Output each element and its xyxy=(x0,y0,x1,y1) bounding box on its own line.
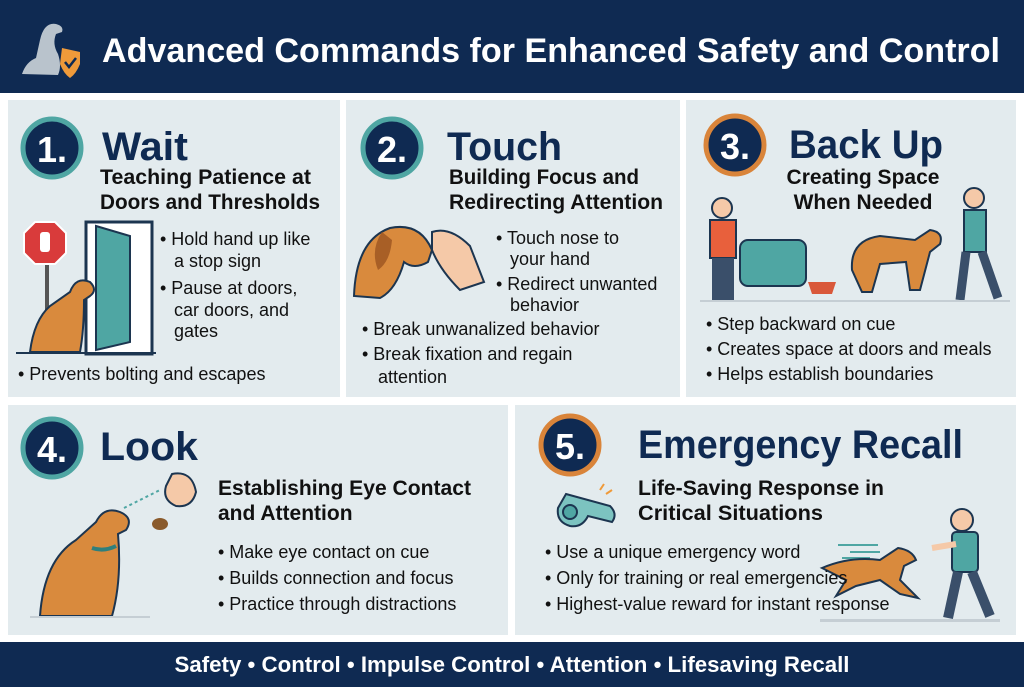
icon: dog with shield xyxy=(22,24,80,78)
subtitle: Life-Saving Response in xyxy=(638,477,884,500)
bullets: • Helps establish boundaries xyxy=(706,364,933,384)
bullets: • Prevents bolting and escapes xyxy=(18,364,265,384)
panel: 4 look xyxy=(8,405,508,635)
footer: Safety • Control • Impulse Control • Attention • Lifesaving Recall xyxy=(174,652,850,677)
bullets: • Break unwanalized behavior xyxy=(362,319,599,339)
bullets: • Use a unique emergency word xyxy=(545,542,800,562)
bullets xyxy=(18,229,310,384)
panel: 3 back up xyxy=(686,100,1016,397)
title: Advanced Commands for Enhanced Safety and Control xyxy=(102,32,1000,70)
subtitle: Teaching Patience at xyxy=(100,166,311,189)
badge 5 xyxy=(541,416,599,474)
bullets xyxy=(706,314,991,384)
icon: whistle xyxy=(558,484,615,526)
bullets: • Hold hand up like xyxy=(160,229,310,249)
bullets: • Highest-value reward for instant response xyxy=(545,594,889,614)
panel: 5 emergency recall xyxy=(515,405,1016,635)
badge 1 xyxy=(23,119,81,177)
badge 3 xyxy=(706,116,764,174)
bullets: • Redirect unwanted xyxy=(496,274,657,294)
subtitle: Creating Space xyxy=(787,166,939,189)
header band xyxy=(0,0,1024,93)
illustration: stop sign, door, dog xyxy=(16,222,156,354)
subtitle: Redirecting Attention xyxy=(449,191,663,214)
subtitle xyxy=(638,477,884,525)
bullets: • Make eye contact on cue xyxy=(218,542,429,562)
subtitle: When Needed xyxy=(794,191,932,214)
subtitle: Building Focus and xyxy=(449,166,639,189)
bullets: • Pause at doors, xyxy=(160,278,297,298)
badge 2: 2. xyxy=(377,129,407,170)
illustration: sitting dog looking at face xyxy=(30,473,196,618)
bullets xyxy=(362,228,657,387)
badge 1: 1. xyxy=(37,129,67,170)
subtitle: Doors and Thresholds xyxy=(100,191,320,214)
badge 2 xyxy=(363,119,421,177)
panel: 2 touch xyxy=(346,100,680,397)
subtitle xyxy=(218,477,471,525)
bullets: • Step backward on cue xyxy=(706,314,895,334)
heading: Touch: Touch xyxy=(447,125,562,169)
bullets: car doors, and xyxy=(174,300,289,320)
subtitle xyxy=(449,166,663,214)
illustration: person, couch, bowl, dog, person xyxy=(700,188,1010,302)
bullets: • Builds connection and focus xyxy=(218,568,453,588)
heading: Back Up: Back Up xyxy=(789,123,943,167)
illustration: running dog and person xyxy=(820,509,1000,622)
panel: 1 wait xyxy=(8,100,340,397)
subtitle xyxy=(100,166,320,214)
heading: Wait: Wait xyxy=(102,125,188,169)
bullets: • Creates space at doors and meals xyxy=(706,339,991,359)
bullets xyxy=(218,542,456,614)
subtitle: and Attention xyxy=(218,502,353,525)
bullets: a stop sign xyxy=(174,251,261,271)
heading: Look: Look xyxy=(100,425,199,469)
bullets: • Practice through distractions xyxy=(218,594,456,614)
bullets xyxy=(545,542,889,614)
bullets: your hand xyxy=(510,249,590,269)
bullets: • Break fixation and regain xyxy=(362,344,572,364)
bullets: • Only for training or real emergencies xyxy=(545,568,847,588)
footer xyxy=(0,642,1024,687)
badge 4 xyxy=(23,419,81,477)
bullets: attention xyxy=(378,367,447,387)
subtitle xyxy=(787,166,939,214)
subtitle: Establishing Eye Contact xyxy=(218,477,471,500)
badge 5: 5. xyxy=(555,426,585,467)
badge 4: 4. xyxy=(37,429,67,470)
bullets: • Touch nose to xyxy=(496,228,619,248)
illustration: dog head and hand xyxy=(354,227,484,298)
bullets: behavior xyxy=(510,295,579,315)
bullets: gates xyxy=(174,321,218,341)
heading: Emergency Recall: Emergency Recall xyxy=(638,423,963,467)
subtitle: Critical Situations xyxy=(638,502,823,525)
badge 3: 3. xyxy=(720,126,750,167)
